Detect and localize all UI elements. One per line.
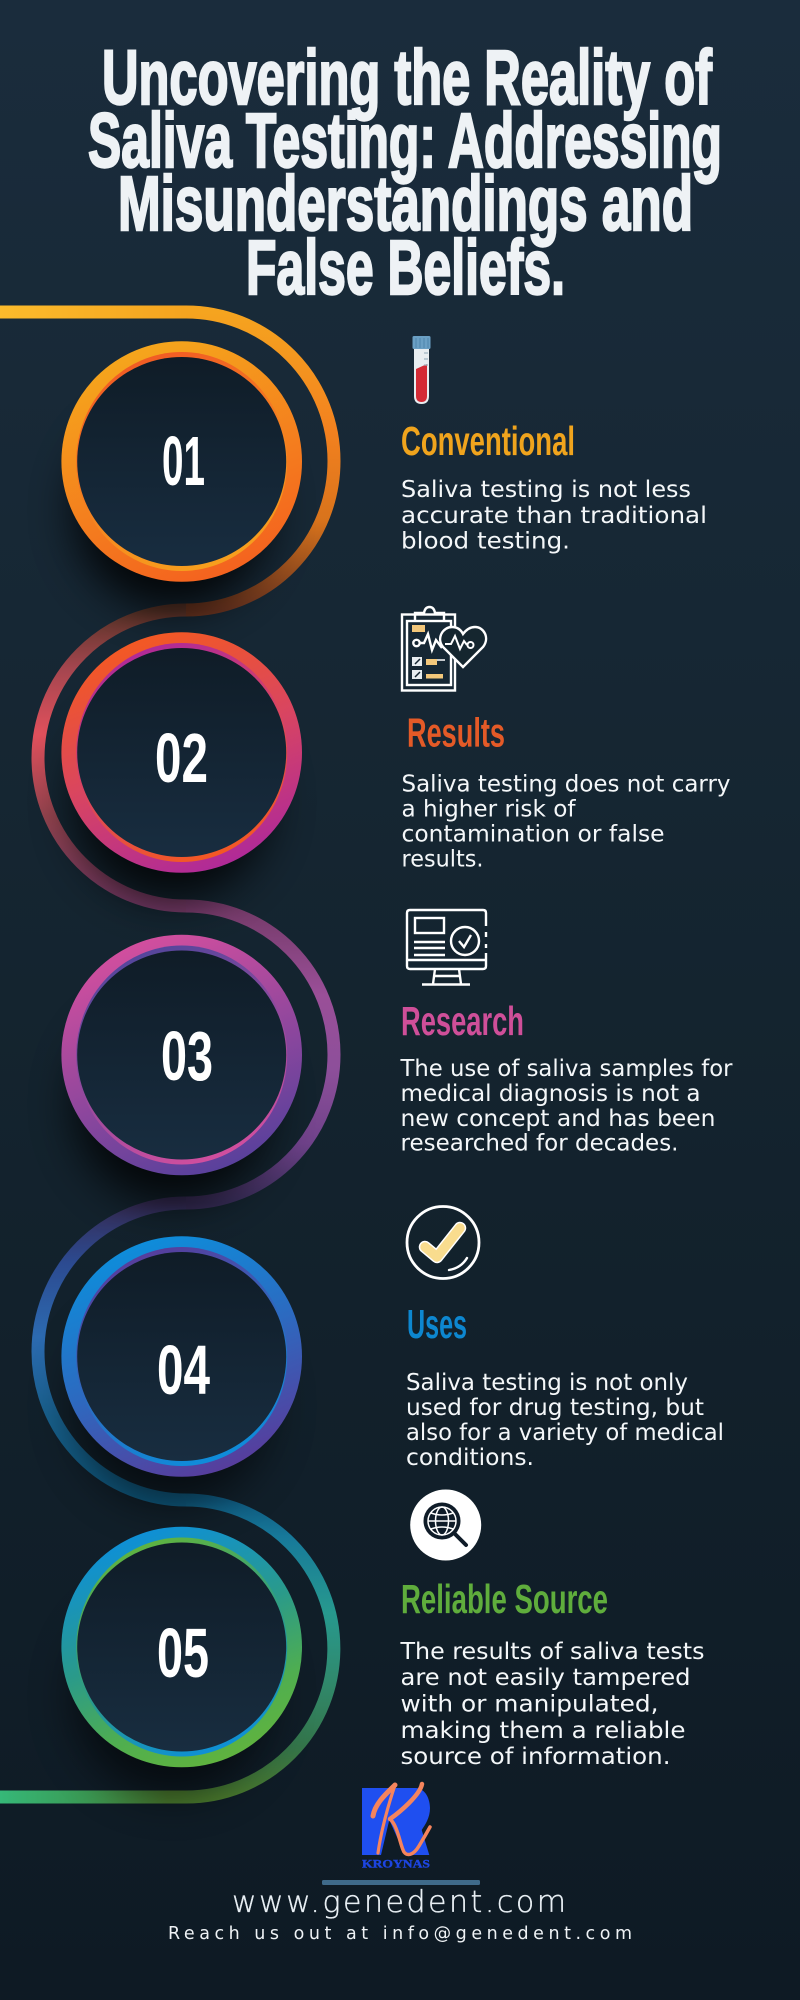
text: reliable source description: The results of saliva tests (399, 1639, 704, 1665)
text: uses description: also for a variety of medical (406, 1420, 724, 1446)
circle 03 (61, 935, 302, 1202)
heading: Results: Results (407, 710, 505, 756)
text: conventional description: accurate than traditional (401, 503, 707, 529)
circle 01: 01 (162, 422, 205, 500)
circle 05: 05 (157, 1614, 209, 1692)
circle 02: 02 (155, 719, 208, 797)
text: conventional description: blood testing. (401, 528, 570, 554)
text: results description: Saliva testing does not carry (402, 772, 730, 798)
heading: Uses: Uses (407, 1301, 467, 1347)
panel: results (402, 607, 730, 872)
icon: computer monitor with check (407, 910, 486, 984)
text: uses description: used for drug testing, but (406, 1395, 704, 1421)
logo: Kroynas: KROYNAS (362, 1856, 430, 1870)
text: research description: medical diagnosis is not a (400, 1081, 700, 1107)
text: uses description: conditions. (406, 1445, 534, 1471)
text: reliable source description: are not easily tampered (400, 1665, 690, 1691)
text: research description (400, 1056, 733, 1156)
circle 02 (61, 632, 302, 899)
text: reliable source description: source of information. (400, 1744, 670, 1770)
icon: magnifier with globe (410, 1490, 481, 1560)
text: results description: contamination or false (402, 822, 664, 848)
circle 01 (61, 341, 302, 608)
text: results description: results. (402, 846, 484, 872)
text: uses description (406, 1370, 724, 1471)
text: conventional description: Saliva testing is not less (401, 477, 691, 503)
text: reliable source description: with or manipulated, (400, 1692, 658, 1718)
panel: reliable source (399, 1490, 704, 1770)
title (88, 35, 722, 311)
text: uses description: Saliva testing is not only (406, 1370, 688, 1396)
text: research description: new concept and has been (400, 1106, 716, 1132)
winding ribbon connector (0, 312, 334, 1797)
icon: check mark badge (407, 1206, 479, 1278)
panel: conventional (401, 336, 707, 554)
panel: research (400, 910, 733, 1156)
circle 05 (61, 1527, 302, 1794)
text: results description: a higher risk of (402, 796, 576, 822)
icon: medical clipboard with heart (402, 607, 486, 690)
circle 03: 03 (161, 1017, 213, 1095)
heading: Conventional: Conventional (401, 418, 575, 464)
footer: website: www.genedent.com (232, 1885, 566, 1920)
icon: blood test tube (412, 336, 430, 404)
heading: Research: Research (401, 998, 524, 1044)
text: conventional description (401, 477, 707, 554)
panel: uses (406, 1206, 724, 1471)
text: research description: The use of saliva samples for (400, 1056, 733, 1082)
text: results description (402, 772, 730, 872)
heading: Reliable Source: Reliable Source (401, 1576, 608, 1622)
text: research description: researched for decades. (400, 1130, 678, 1156)
logo: Kroynas (362, 1784, 430, 1870)
circle 04: 04 (157, 1331, 210, 1409)
footer divider bar (322, 1880, 480, 1885)
text: reliable source description: making them a reliable (400, 1718, 686, 1744)
footer: contact email: Reach us out at info@genedent.com (168, 1924, 632, 1944)
circle 04 (61, 1236, 302, 1503)
text: reliable source description (399, 1639, 704, 1770)
title: False Beliefs. (246, 225, 565, 311)
